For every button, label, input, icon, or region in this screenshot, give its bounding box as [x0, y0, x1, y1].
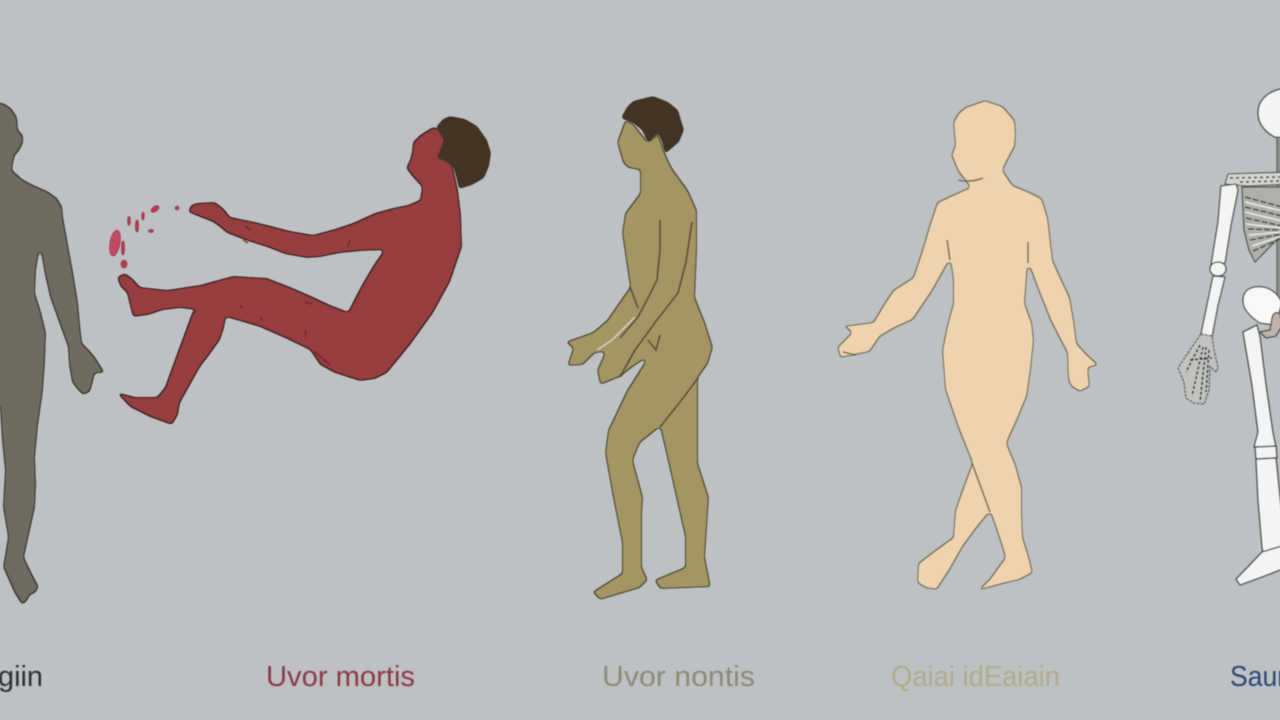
pale body silhouette [837, 100, 1099, 591]
olive body arm highlight [597, 317, 635, 350]
pelvis [1243, 287, 1280, 338]
olive body hair [621, 96, 684, 154]
label: red figure: Uvor mortis [266, 661, 415, 693]
figure: livor mortis red body [108, 116, 491, 425]
red body hair [436, 116, 491, 189]
label: pale figure: Qaiai idEaiain [891, 661, 1060, 693]
olive body limb lines [620, 220, 698, 427]
hand [1178, 334, 1218, 404]
leg bones [1236, 325, 1280, 585]
decay flakes [108, 204, 179, 268]
labels row [0, 661, 1280, 693]
figure: pale cream body [837, 100, 1099, 591]
arm bones [1201, 184, 1238, 337]
label: olive figure: Uvor nontis [602, 661, 755, 693]
foot [1236, 545, 1280, 585]
rib cage [1242, 187, 1280, 262]
red body limb lines [192, 226, 350, 365]
red body silhouette [116, 127, 462, 425]
pale body inner lines [843, 178, 1028, 512]
skull [1258, 88, 1280, 138]
figure: skeleton [1178, 88, 1280, 585]
olive body silhouette [565, 120, 713, 600]
spine [1277, 137, 1280, 307]
collar bone [1225, 172, 1280, 186]
figure: algor olive body [565, 96, 713, 600]
figure: pallor mortis grey body [0, 102, 105, 605]
